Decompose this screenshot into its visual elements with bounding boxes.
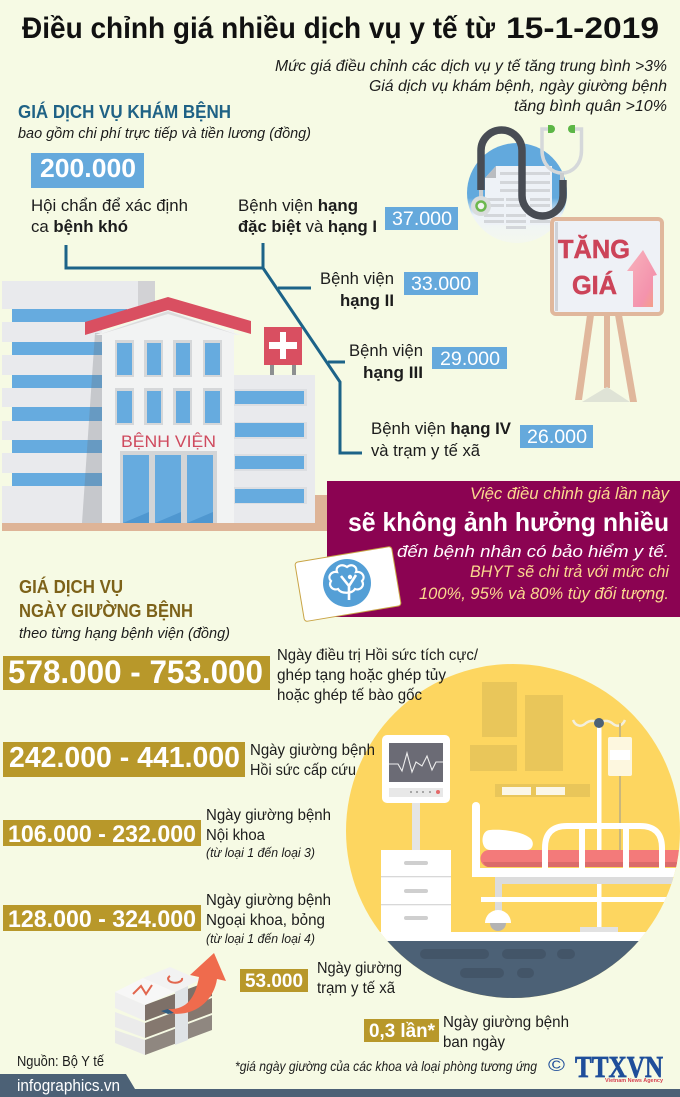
price bar: surgery and burns: Ngoại khoa, bỏng — [206, 912, 325, 929]
panel: insurance callout: đến bệnh nhân có bảo hiểm y tế. — [397, 542, 669, 561]
price: day-care bed: Ngày giường bệnh — [443, 1014, 569, 1031]
icon: health insurance card — [295, 546, 401, 622]
exam price: consultation: 200.000 — [40, 153, 136, 183]
doors — [120, 451, 217, 523]
exam price: class II: 33.000 — [411, 273, 471, 295]
price: commune health station — [240, 960, 402, 997]
price bar: intensive care: Ngày điều trị Hồi sức tích cực/ — [277, 647, 479, 664]
heading: exam service prices: GIÁ DỊCH VỤ KHÁM BỆNH — [18, 101, 231, 122]
price: commune health station: 53.000 — [245, 970, 303, 992]
intro text: Giá dịch vụ khám bệnh, ngày giường bệnh — [369, 78, 667, 95]
price: day-care bed: ban ngày — [443, 1034, 505, 1051]
price bar: intensive care — [3, 647, 479, 704]
price bar: emergency resuscitation: Hồi sức cấp cứu — [250, 762, 356, 779]
roof — [85, 297, 251, 335]
panel: insurance callout: sẽ không ảnh hưởng nhiều — [348, 507, 669, 537]
hospital building — [2, 281, 327, 531]
price bar: emergency resuscitation: 242.000 - 441.000 — [9, 742, 240, 774]
hospital name: BỆNH VIỆN — [121, 432, 216, 451]
exam price: special and class I: Bệnh viện hạng — [238, 196, 358, 215]
footnote: *giá ngày giường của các khoa và loại phòng tương ứng — [235, 1058, 537, 1074]
connector lines — [66, 243, 362, 453]
exam price: class IV and commune station: Bệnh viện hạng IV — [371, 419, 512, 438]
exam price: class III: Bệnh viện — [349, 341, 423, 360]
icon: price increase sign: TĂNG — [558, 234, 630, 264]
panel: insurance callout: Việc điều chỉnh giá lần này — [470, 485, 671, 503]
icon: red cross sign — [264, 327, 302, 375]
bed — [472, 802, 680, 931]
exam price: special and class I — [238, 196, 458, 236]
heading: exam service prices — [18, 101, 311, 142]
intro text — [275, 58, 667, 115]
price bar: surgery and burns: Ngày giường bệnh — [206, 892, 331, 909]
ground — [2, 495, 327, 531]
copyright mark: © — [548, 1055, 565, 1075]
heading: exam service prices: bao gồm chi phí trực tiếp và tiền lương (đồng) — [18, 126, 311, 142]
price bar: internal medicine: Ngày giường bệnh — [206, 807, 331, 824]
intro text: Mức giá điều chỉnh các dịch vụ y tế tăng trung bình >3% — [275, 58, 667, 75]
monitor — [382, 735, 450, 850]
panel: insurance callout: BHYT sẽ chi trả với mức chi — [470, 563, 670, 581]
price bar: surgery and burns: (từ loại 1 đến loại 4) — [206, 932, 315, 946]
panel: insurance callout: 100%, 95% và 80% tùy đối tượng. — [419, 585, 669, 603]
exam price: class II — [320, 269, 478, 310]
main block — [102, 330, 234, 523]
exam price: consultation: Hội chẩn để xác định — [31, 196, 188, 215]
exam price: class II: Bệnh viện — [320, 269, 394, 288]
heading: bed-day prices: GIÁ DỊCH VỤ — [19, 576, 123, 597]
price bar: internal medicine: Nội khoa — [206, 827, 265, 844]
exam price: special and class I: đặc biệt và hạng I — [238, 217, 377, 236]
price: commune health station: trạm y tế xã — [317, 980, 395, 997]
price bar: surgery and burns — [3, 892, 331, 946]
windows — [115, 340, 222, 425]
price bar: emergency resuscitation — [3, 742, 375, 779]
exam price: class IV and commune station: 26.000 — [527, 426, 587, 448]
heading: bed-day prices: NGÀY GIƯỜNG BỆNH — [19, 600, 193, 621]
price bar: intensive care: hoặc ghép tế bào gốc — [277, 687, 422, 704]
icon: price increase sign — [552, 219, 662, 402]
exam price: class III: hạng III — [363, 363, 423, 382]
footer bar — [0, 1074, 680, 1097]
exam price: class III: 29.000 — [440, 348, 500, 370]
price bar: intensive care: ghép tạng hoặc ghép tủy — [277, 667, 446, 684]
price: day-care bed: 0,3 lần* — [369, 1020, 435, 1042]
footer bar: infographics.vn — [17, 1076, 120, 1095]
heading: bed-day prices — [19, 576, 230, 642]
heading: bed-day prices: theo từng hạng bệnh viện (đồng) — [19, 626, 230, 642]
price: day-care bed — [364, 1014, 569, 1051]
exam price: consultation: ca bệnh khó — [31, 217, 128, 236]
drawers — [381, 850, 451, 933]
price bar: internal medicine — [3, 807, 331, 860]
logo: TTXVN: Vietnam News Agency — [605, 1078, 664, 1084]
price bar: internal medicine: (từ loại 1 đến loại 3) — [206, 846, 315, 860]
left tower — [2, 281, 155, 523]
price bar: surgery and burns: 128.000 - 324.000 — [8, 906, 196, 933]
price bar: intensive care: 578.000 - 753.000 — [8, 654, 263, 690]
exam price: consultation — [31, 153, 188, 236]
wall panels — [470, 682, 590, 797]
panel: insurance callout — [295, 481, 680, 622]
title: 15-1-2019 — [506, 12, 659, 45]
right wing — [234, 375, 315, 523]
exam price: class III — [349, 341, 507, 382]
icon: price increase sign: GIÁ — [572, 270, 617, 300]
price bar: emergency resuscitation: Ngày giường bệnh — [250, 742, 375, 759]
price: commune health station: Ngày giường — [317, 960, 402, 977]
floor — [380, 932, 646, 942]
exam price: class II: hạng II — [340, 291, 394, 310]
icon: money stack with rising arrow — [115, 953, 226, 1055]
IV stand — [573, 718, 632, 933]
exam price: class IV and commune station — [371, 419, 593, 460]
intro text: tăng bình quân >10% — [514, 98, 667, 115]
exam price: special and class I: 37.000 — [392, 208, 452, 230]
illustration: hospital bed room — [340, 664, 680, 1001]
exam price: class IV and commune station: và trạm y tế xã — [371, 441, 481, 460]
source: Nguồn: Bộ Y tế — [17, 1054, 104, 1070]
icon: stethoscope and document — [467, 125, 582, 243]
price bar: internal medicine: 106.000 - 232.000 — [8, 821, 196, 848]
title: Điều chỉnh giá nhiều dịch vụ y tế từ — [22, 12, 495, 45]
